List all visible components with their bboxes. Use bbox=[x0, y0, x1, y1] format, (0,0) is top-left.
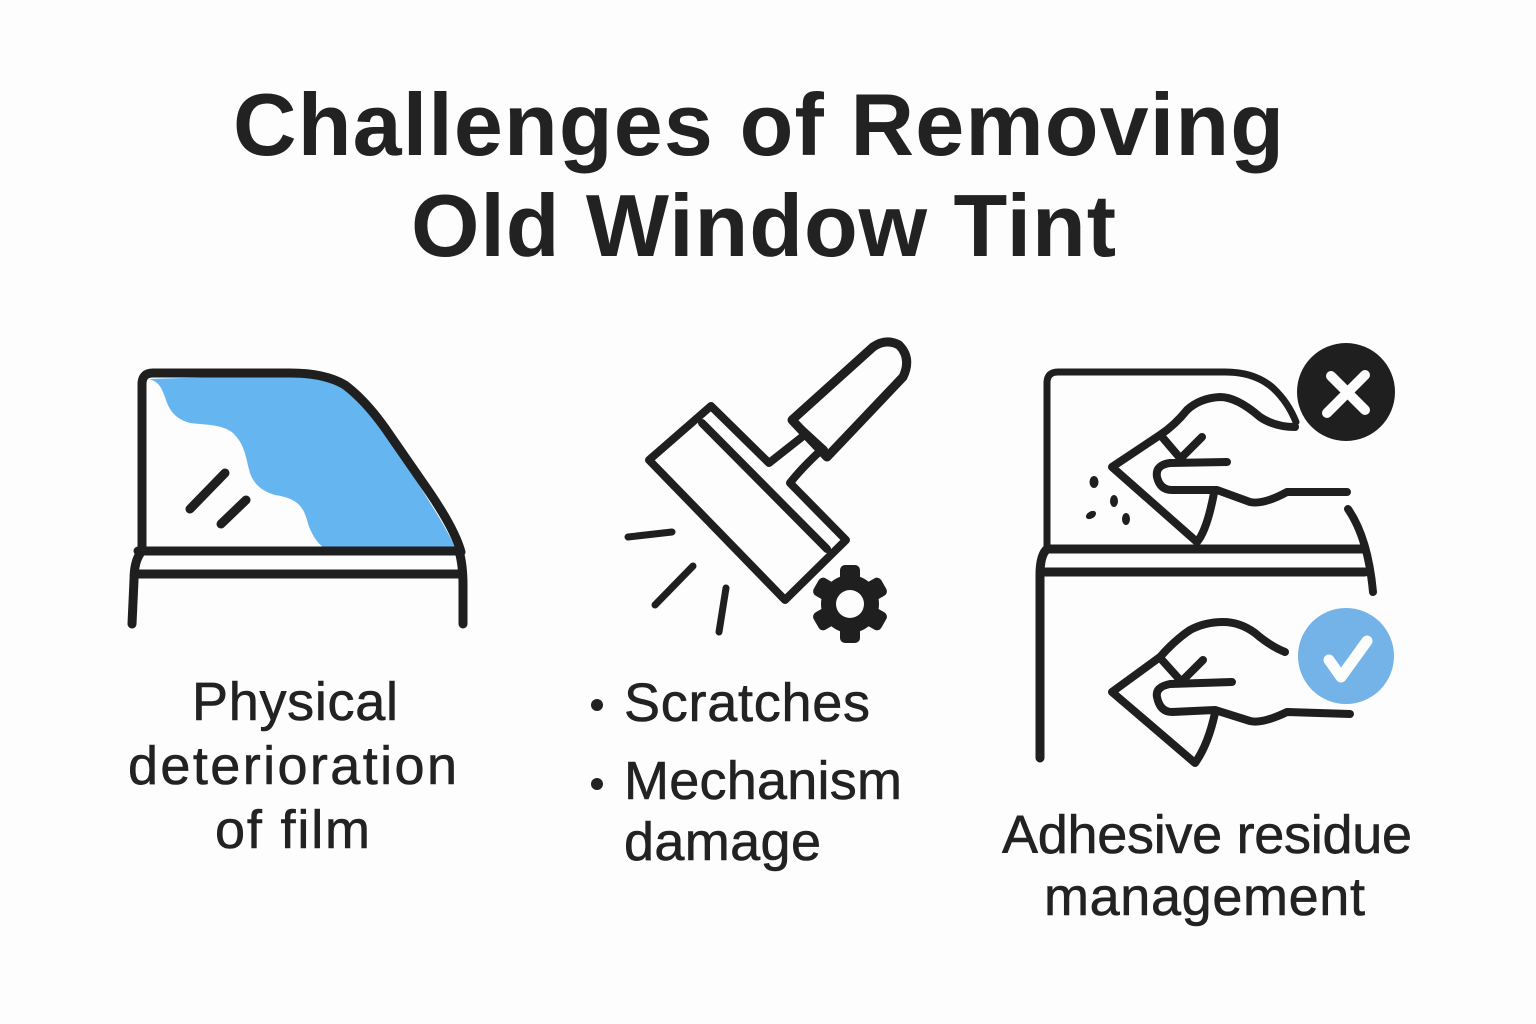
icon: car window with peeling tint bbox=[132, 373, 463, 624]
icon: check badge bbox=[1298, 608, 1394, 704]
door rails and legs bbox=[1040, 549, 1365, 758]
peeling blue tint bbox=[148, 375, 455, 547]
label: adhesive residue management: management bbox=[1044, 867, 1365, 927]
icon: cross badge bbox=[1297, 343, 1395, 441]
residue specks bbox=[1084, 476, 1130, 525]
scraper blade and neck bbox=[649, 406, 846, 600]
door legs bbox=[132, 551, 463, 624]
bullet list: damage bbox=[624, 812, 821, 872]
bottom hand with cloth bbox=[1112, 622, 1350, 763]
label: physical deterioration: of film bbox=[215, 800, 370, 860]
glass glare marks bbox=[190, 473, 246, 524]
top hand with cloth bbox=[1112, 397, 1347, 542]
icon: window with scraping hands bbox=[1040, 343, 1395, 763]
panel: adhesive residue management bbox=[1002, 343, 1412, 927]
label: physical deterioration: deterioration bbox=[128, 736, 457, 796]
title: Challenges of Removing bbox=[233, 75, 1284, 174]
panel: scratches and mechanism damage bbox=[591, 342, 907, 872]
title bbox=[233, 75, 1284, 275]
handle collar bbox=[800, 428, 824, 450]
icon: scraper bbox=[628, 342, 907, 643]
title: Old Window Tint bbox=[411, 176, 1116, 275]
label: physical deterioration: Physical bbox=[192, 672, 398, 732]
bullet list: Scratches bbox=[624, 673, 870, 733]
scratch rays bbox=[628, 532, 726, 632]
panel: physical deterioration bbox=[128, 373, 463, 860]
label: adhesive residue management: Adhesive residue bbox=[1002, 805, 1412, 865]
label: adhesive residue management bbox=[1002, 805, 1412, 927]
door right edge bbox=[1348, 509, 1373, 592]
label: physical deterioration bbox=[128, 672, 457, 860]
bullet list: Mechanism bbox=[624, 751, 902, 811]
bullet list bbox=[591, 673, 902, 872]
window frame bbox=[142, 373, 461, 552]
icon: gear bbox=[811, 565, 889, 643]
window frame bbox=[1047, 372, 1296, 548]
door rails bbox=[136, 551, 460, 574]
scraper handle bbox=[792, 342, 907, 457]
